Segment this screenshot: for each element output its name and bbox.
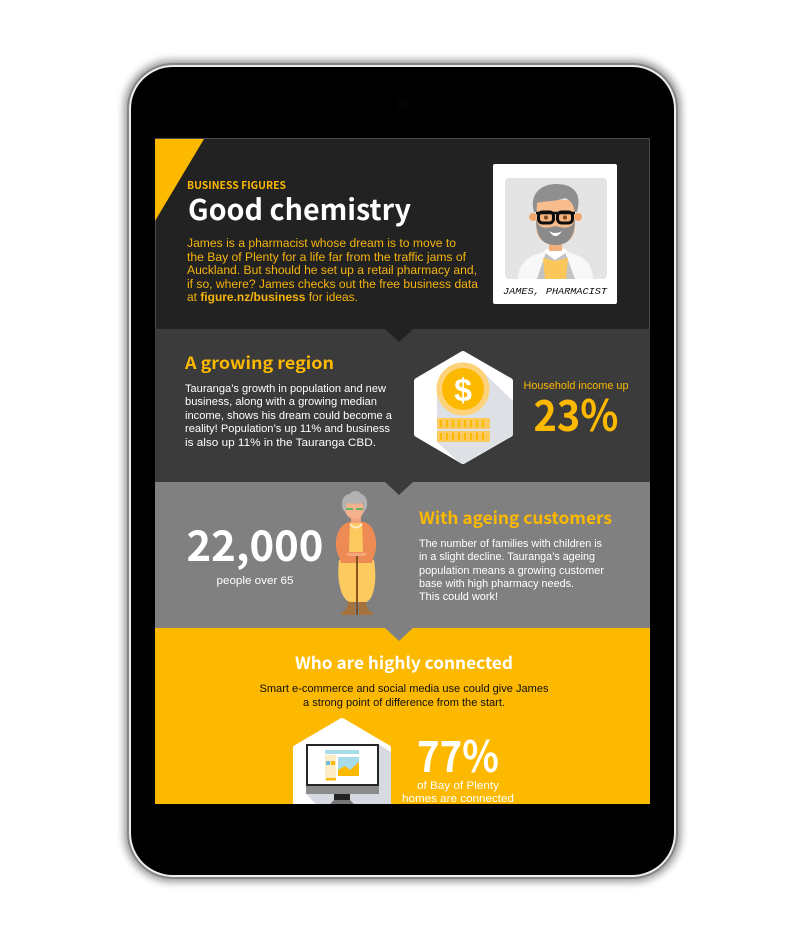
- intro text: at figure.nz/business for ideas.: [187, 290, 358, 304]
- region text: business, along with a growing median: [185, 396, 377, 408]
- panel: intro: [155, 138, 650, 330]
- icon: pharmacist: [518, 184, 593, 279]
- yellow corner triangle: [155, 139, 204, 221]
- stat: people over 65: [188, 530, 322, 586]
- intro text: the Bay of Plenty for a life far from the traffic jams of: [187, 250, 467, 264]
- stat: household income: 23%: [534, 382, 618, 444]
- ageing text: This could work!: [419, 591, 498, 603]
- ageing text: in a slight decline. Tauranga’s ageing: [419, 551, 595, 563]
- stat: homes connected: [402, 740, 514, 802]
- intro text: [187, 236, 478, 304]
- region text: reality! Population’s up 11% and business: [185, 423, 390, 435]
- connected text: a strong point of difference from the start.: [303, 697, 505, 709]
- icon: coins hexagon: [417, 354, 516, 466]
- heading: With ageing customers: [419, 505, 612, 529]
- stat: homes connected: 77%: [417, 723, 499, 785]
- title: Good chemistry: [188, 188, 411, 229]
- connected text: Smart e-commerce and social media use could give James: [260, 683, 549, 695]
- heading: Who are highly connected: [295, 650, 513, 674]
- eyebrow heading: BUSINESS FIGURES: [187, 178, 286, 193]
- region text: income, shows his dream could become a: [185, 410, 393, 422]
- stat: people over 65: 22,000: [186, 513, 324, 574]
- intro text: Auckland. But should he set up a retail pharmacy and,: [187, 263, 477, 277]
- panel: a growing region: [155, 329, 650, 482]
- tablet screen: [155, 138, 650, 810]
- panel: highly connected: [155, 628, 650, 810]
- panel: ageing customers: [155, 482, 650, 628]
- stat: household income: Household income up: [524, 380, 628, 392]
- stat: homes connected: homes are connected: [402, 793, 514, 805]
- region text: [185, 383, 393, 449]
- heading: A growing region: [184, 350, 334, 374]
- region text: Tauranga’s growth in population and new: [185, 383, 387, 395]
- stat: homes connected: of Bay of Plenty: [417, 780, 500, 792]
- ageing text: [419, 538, 604, 603]
- region text: is also up 11% in the Tauranga CBD.: [185, 437, 376, 449]
- ageing text: The number of families with children is: [419, 538, 602, 550]
- ageing text: population means a growing customer: [419, 565, 604, 577]
- intro text: James is a pharmacist whose dream is to move to: [187, 236, 456, 250]
- icon: coins hexagon: $: [454, 372, 472, 408]
- connected text: [260, 683, 549, 709]
- icon: elderly woman: [336, 491, 376, 615]
- icon: computer monitor: [296, 721, 391, 810]
- portrait caption: JAMES, PHARMACIST: [503, 286, 608, 297]
- intro text: if so, where? James checks out the free business data: [187, 277, 478, 291]
- stat: people over 65: people over 65: [216, 575, 294, 587]
- ageing text: base with high pharmacy needs.: [419, 578, 574, 590]
- portrait card: James: [493, 164, 617, 304]
- tablet device: [124, 60, 681, 882]
